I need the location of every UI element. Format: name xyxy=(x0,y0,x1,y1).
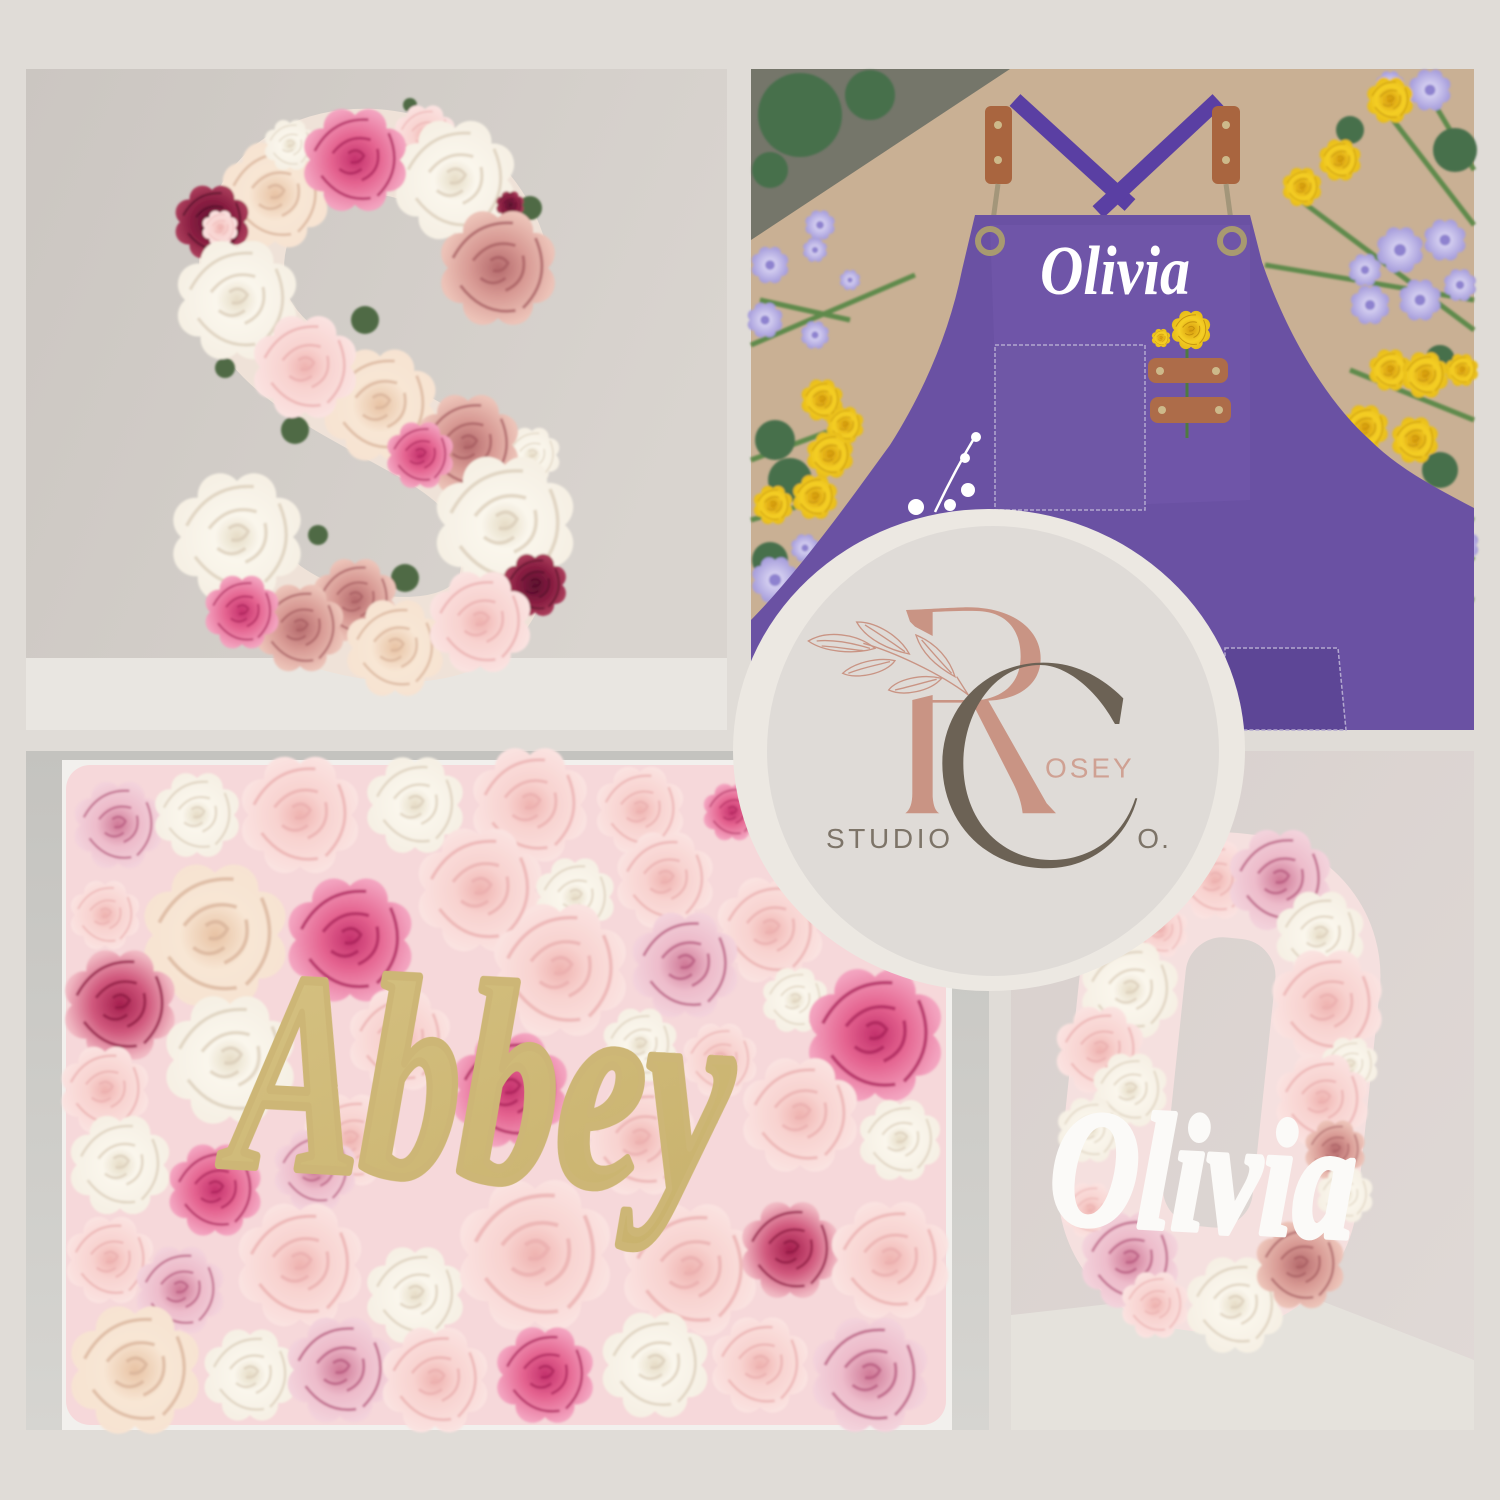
yellow rose in leather loops xyxy=(1152,311,1210,438)
green stems xyxy=(751,80,1474,600)
letter R xyxy=(905,607,1056,813)
panel: purple apron photo xyxy=(748,69,1478,730)
lower pocket xyxy=(1225,648,1346,730)
letter S base xyxy=(240,151,505,639)
apron rings xyxy=(978,229,1244,253)
leather strap tabs xyxy=(985,106,1240,184)
green leaves behind letter S xyxy=(215,98,542,592)
apron name: Olivia xyxy=(1040,233,1190,310)
apron body xyxy=(751,215,1474,730)
panel: floral letter O photo xyxy=(1011,751,1474,1430)
flower wall base xyxy=(66,765,946,1425)
leaf sprig xyxy=(808,622,968,695)
white Olivia sign: Olivia xyxy=(1046,1075,1360,1274)
gold Abbey sign: Abbey xyxy=(213,911,742,1254)
wordmark O.: O. xyxy=(1137,823,1169,854)
dark foliage xyxy=(752,70,1477,578)
wordmark OSEY: OSEY xyxy=(1045,753,1132,784)
white sprig print xyxy=(908,432,981,515)
logo mark xyxy=(808,607,1169,868)
wordmark STUDIO: STUDIO xyxy=(826,823,950,854)
panel: floral letter S photo xyxy=(26,69,727,730)
leather loops xyxy=(1148,358,1231,423)
apron straps xyxy=(1015,100,1218,212)
yellow roses xyxy=(754,77,1478,524)
letter C xyxy=(942,663,1137,868)
lavender flowers xyxy=(748,70,1478,628)
strap hooks xyxy=(992,184,1232,228)
apron shading xyxy=(990,225,1250,510)
letter O base xyxy=(1102,876,1337,1289)
circular logo badge xyxy=(733,509,1245,991)
bib pocket xyxy=(995,345,1145,510)
corner fabric xyxy=(751,69,1010,240)
panel: Abbey flower wall photo xyxy=(26,748,989,1434)
